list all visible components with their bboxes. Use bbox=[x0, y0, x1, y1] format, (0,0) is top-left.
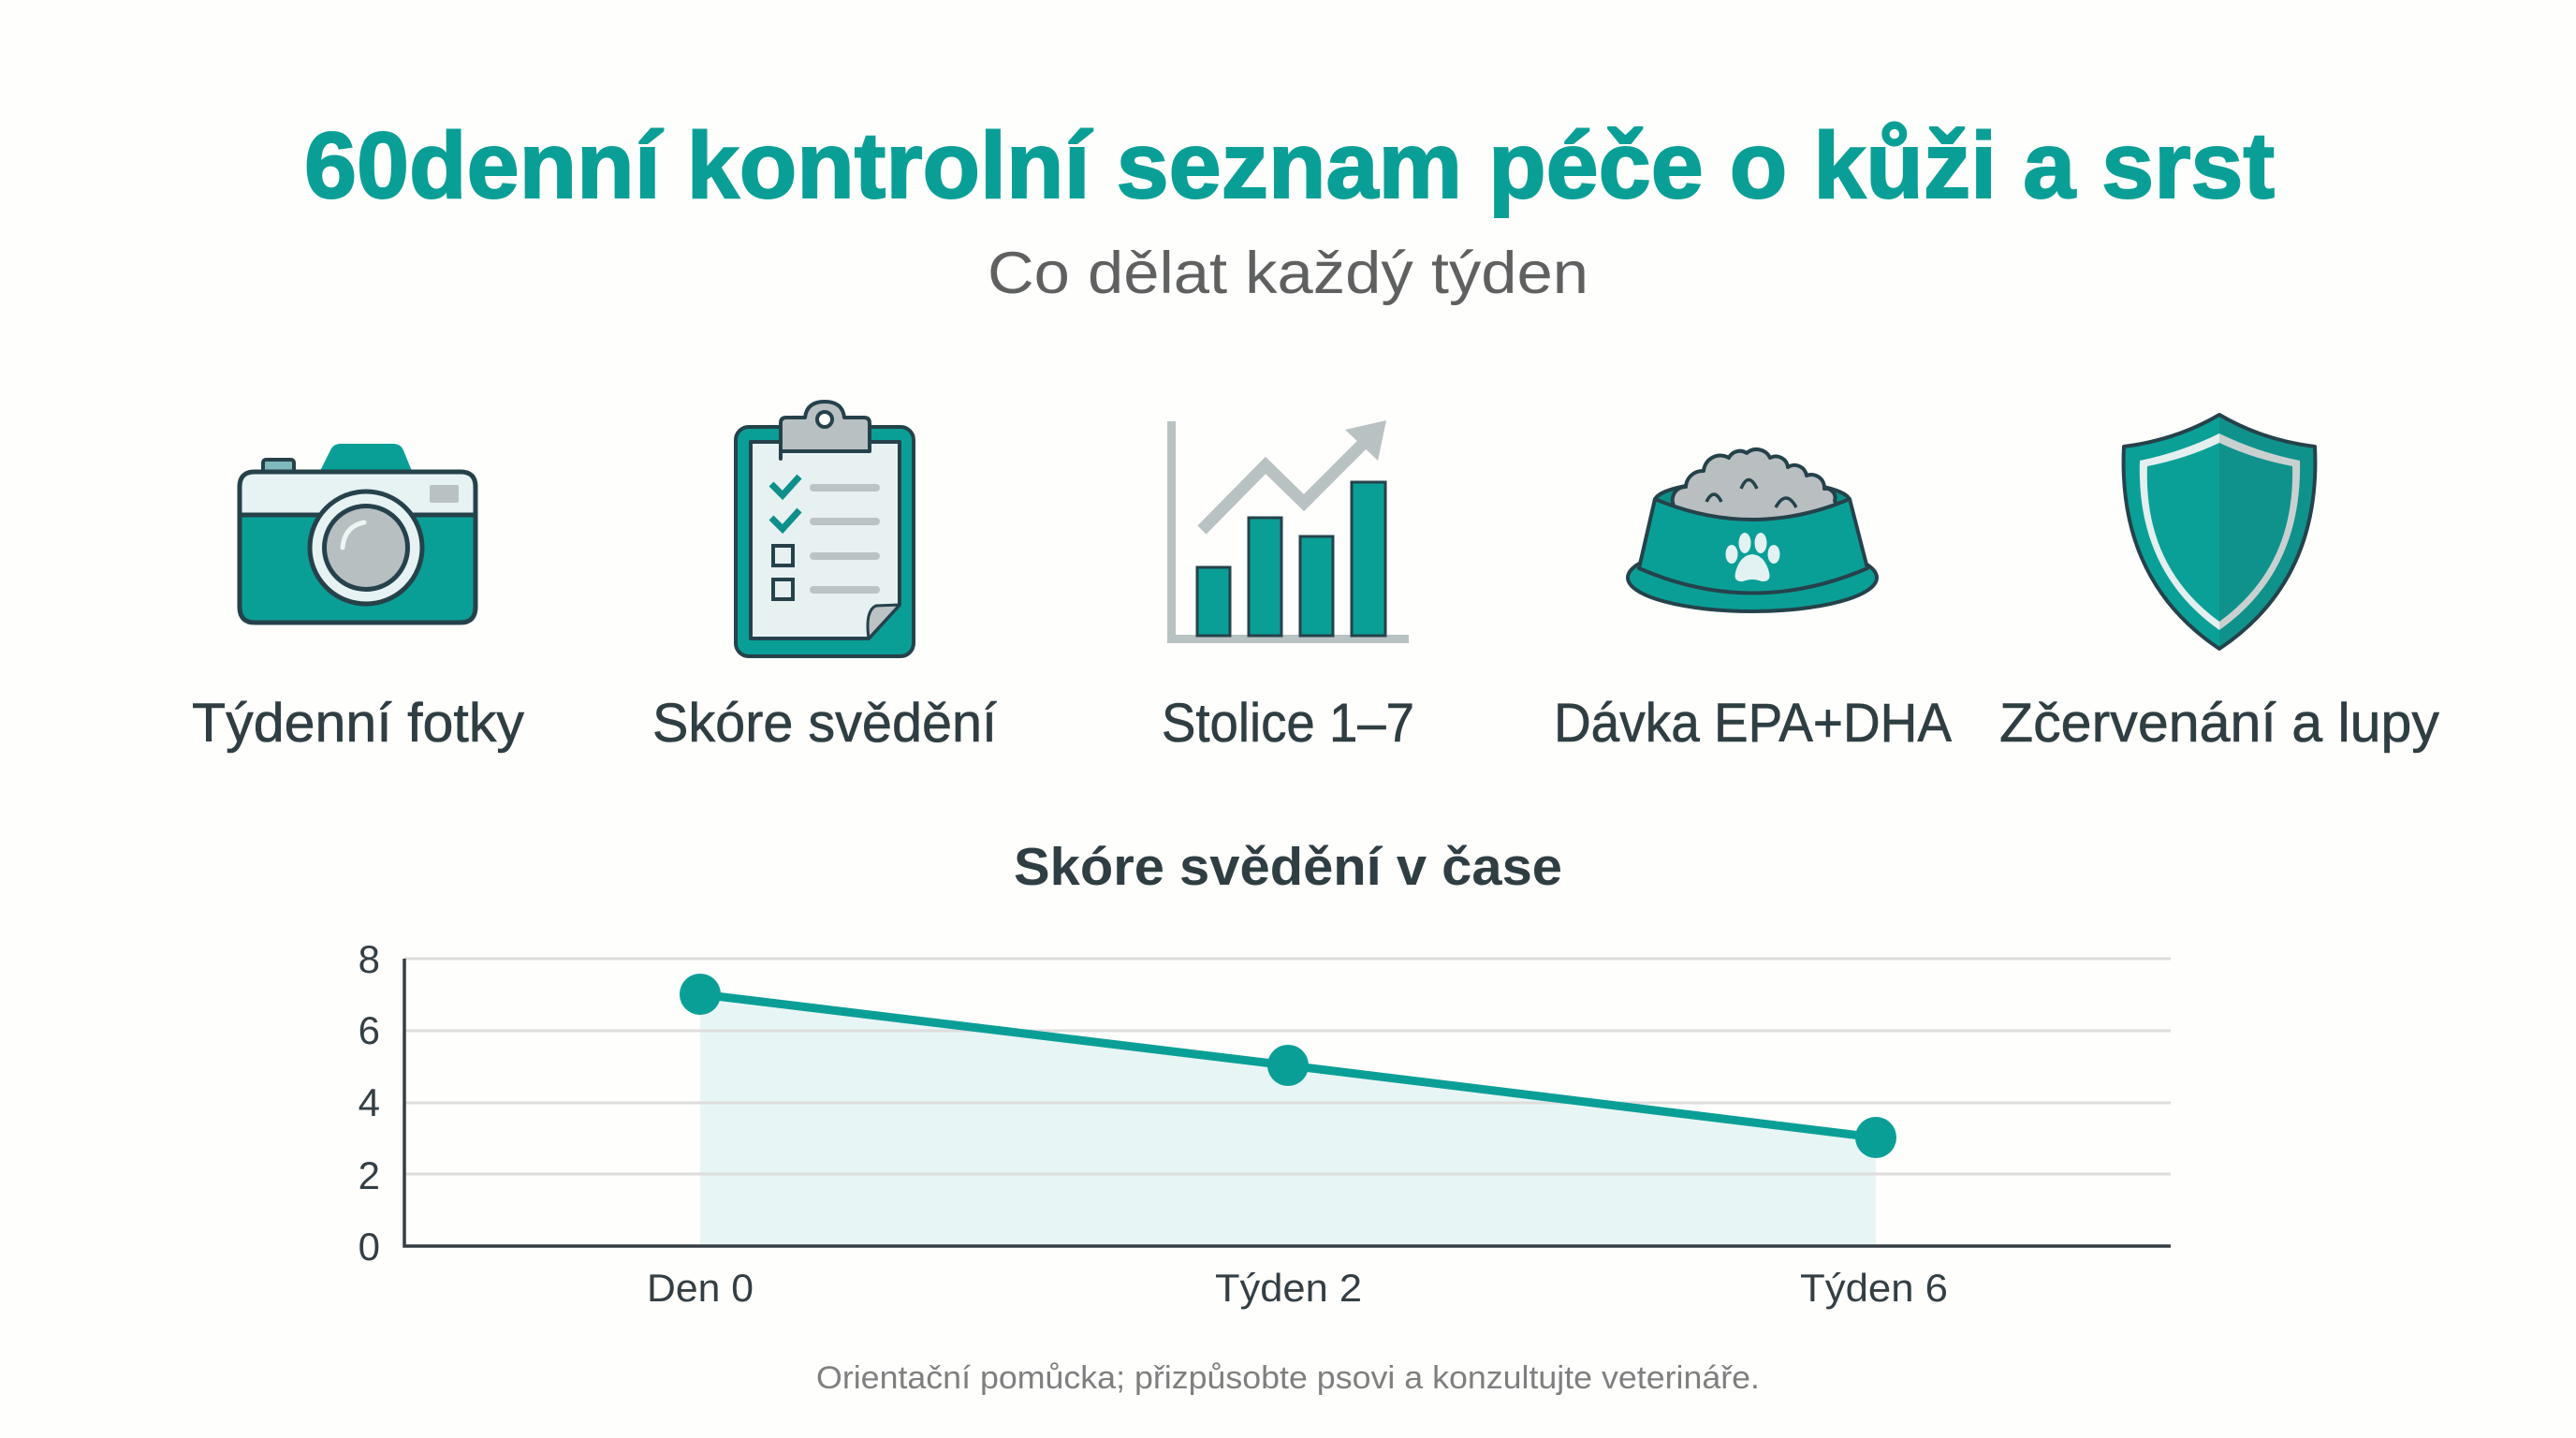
label: Týdenní fotky: Týdenní fotky bbox=[192, 693, 524, 754]
line chart: itch score over time: Den 0 bbox=[647, 1266, 754, 1310]
label: Zčervenání a lupy: Zčervenání a lupy bbox=[1999, 693, 2439, 754]
label: Stolice 1–7: Stolice 1–7 bbox=[1162, 693, 1414, 754]
line chart: itch score over time: 4 bbox=[359, 1080, 380, 1124]
subtitle: Co dělat každý týden bbox=[988, 241, 1588, 306]
title: 60denní kontrolní seznam péče o kůži a srst bbox=[304, 113, 2275, 218]
line chart: itch score over time: 0 bbox=[359, 1225, 380, 1269]
icon: clipboard checklist bbox=[736, 402, 914, 656]
line chart: itch score over time: 8 bbox=[359, 937, 380, 981]
label: Skóre svědění: Skóre svědění bbox=[652, 693, 997, 754]
line chart: itch score over time: Týden 2 bbox=[1215, 1266, 1362, 1310]
chart title: Skóre svědění v čase bbox=[1014, 837, 1562, 897]
line chart: itch score over time: Týden 6 bbox=[1800, 1266, 1948, 1310]
footnote: Orientační pomůcka; přizpůsobte psovi a konzultujte veterináře. bbox=[816, 1360, 1760, 1396]
line chart: itch score over time: 6 bbox=[359, 1008, 380, 1052]
line chart: itch score over time bbox=[359, 937, 2171, 1310]
icon: rising bar chart bbox=[1167, 420, 1409, 643]
icon: food bowl with paw bbox=[1628, 449, 1877, 611]
icon: camera bbox=[240, 444, 476, 623]
icon: shield bbox=[2124, 415, 2315, 649]
line chart: itch score over time: 2 bbox=[359, 1153, 380, 1197]
label: Dávka EPA+DHA: Dávka EPA+DHA bbox=[1554, 693, 1952, 754]
